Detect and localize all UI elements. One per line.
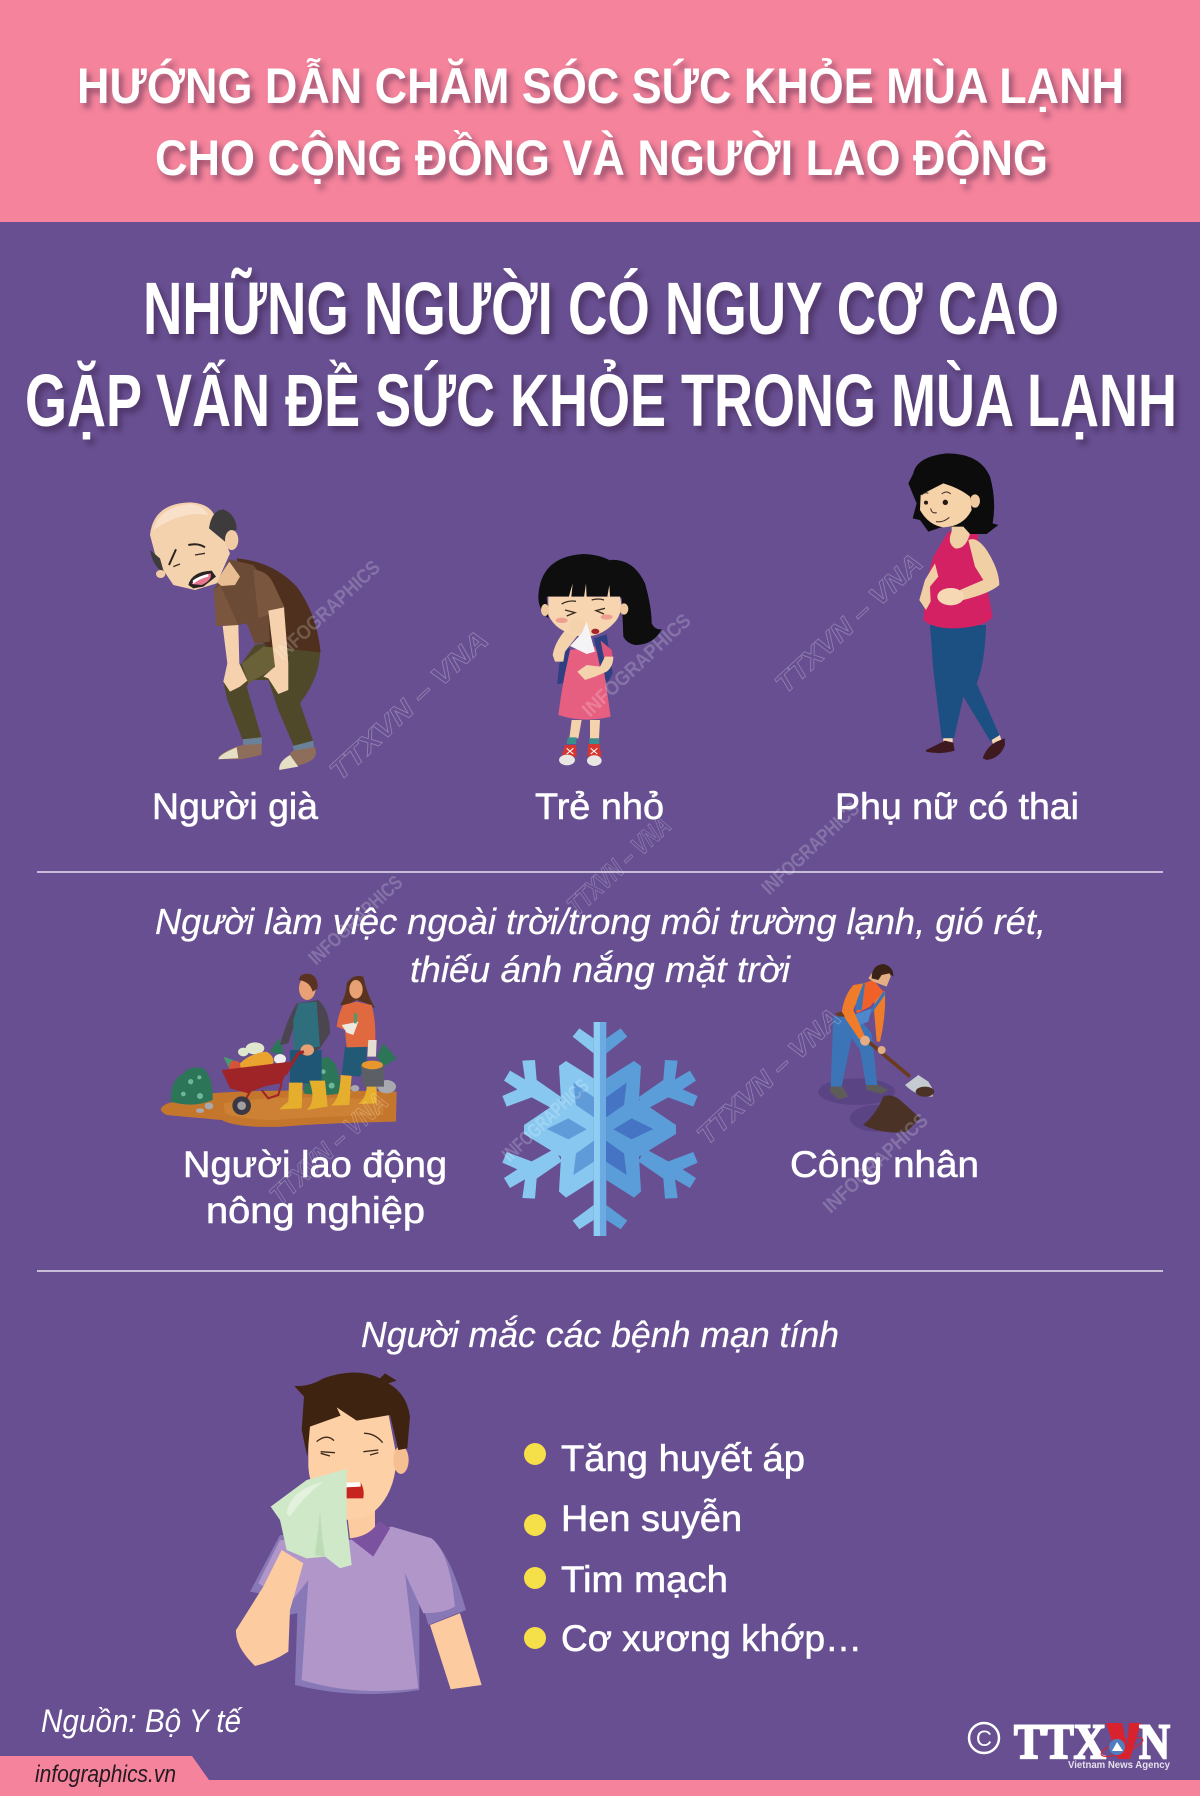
watermarks: INFOGRAPHICS [578, 610, 696, 721]
icon: pregnant woman [908, 453, 1005, 760]
watermarks: INFOGRAPHICS [819, 1110, 933, 1218]
icon: sick man [236, 1372, 482, 1694]
text block: outdoor workers [155, 901, 1046, 990]
label: agricultural workers: nông nghiệp [206, 1190, 425, 1231]
bullet 3: Tim mạch [561, 1559, 728, 1600]
logo: TTXVN: N [1139, 1713, 1170, 1769]
label: pregnant women: Phụ nữ có thai [835, 786, 1079, 827]
watermarks: TTXVN – VNA [769, 548, 929, 699]
main title [25, 267, 1177, 442]
text block: outdoor workers: Người làm việc ngoài trời/trong môi trường lạnh, gió rét, [155, 901, 1046, 942]
watermarks [264, 548, 933, 1218]
bullet 2: Hen suyễn [561, 1498, 742, 1539]
header title: CHO CỘNG ĐỒNG VÀ NGƯỜI LAO ĐỘNG [155, 129, 1048, 186]
label: agricultural workers [183, 1144, 447, 1231]
icon: old man [150, 502, 321, 770]
header title [77, 57, 1124, 186]
watermarks: TTXVN – VNA [691, 1002, 847, 1150]
watermarks: INFOGRAPHICS [758, 798, 864, 899]
label: children: Trẻ nhỏ [535, 786, 664, 827]
bullet 1: Tăng huyết áp [561, 1438, 805, 1479]
watermarks: INFOGRAPHICS [305, 872, 407, 970]
watermarks: TTXVN – VNA [264, 1086, 394, 1211]
text block: outdoor workers: thiếu ánh nắng mặt trời [410, 949, 791, 990]
logo: TTXVN: C [976, 1726, 992, 1751]
snowflake right half [600, 1022, 698, 1236]
snowflake left half [502, 1022, 600, 1236]
watermarks: INFOGRAPHICS [498, 1075, 594, 1166]
icon: farm workers [161, 974, 397, 1127]
watermarks: TTXVN – VNA [561, 810, 677, 921]
source: Nguồn: Bộ Y tế [41, 1703, 243, 1739]
label: elderly: Người già [152, 786, 318, 827]
logo: TTXVN: TTX [1014, 1713, 1106, 1769]
icon: little girl [538, 554, 662, 766]
footer website: infographics.vn [35, 1761, 176, 1788]
footer band [0, 1756, 1200, 1796]
text block: chronic illness: Người mắc các bệnh mạn tính [361, 1314, 839, 1355]
icon: digging worker [818, 964, 934, 1132]
watermarks: INFOGRAPHICS [271, 557, 385, 665]
watermarks: TTXVN – VNA [324, 625, 494, 786]
logo: TTXVN [969, 1713, 1170, 1771]
logo: TTXVN: Vietnam News Agency [1068, 1759, 1170, 1771]
label: laborers: Công nhân [790, 1144, 979, 1185]
list: chronic diseases [524, 1438, 862, 1659]
icon: snowflake [502, 1022, 698, 1236]
label: agricultural workers: Người lao động [183, 1144, 447, 1185]
bullet 4: Cơ xương khớp… [561, 1618, 862, 1659]
header band [0, 0, 1200, 222]
